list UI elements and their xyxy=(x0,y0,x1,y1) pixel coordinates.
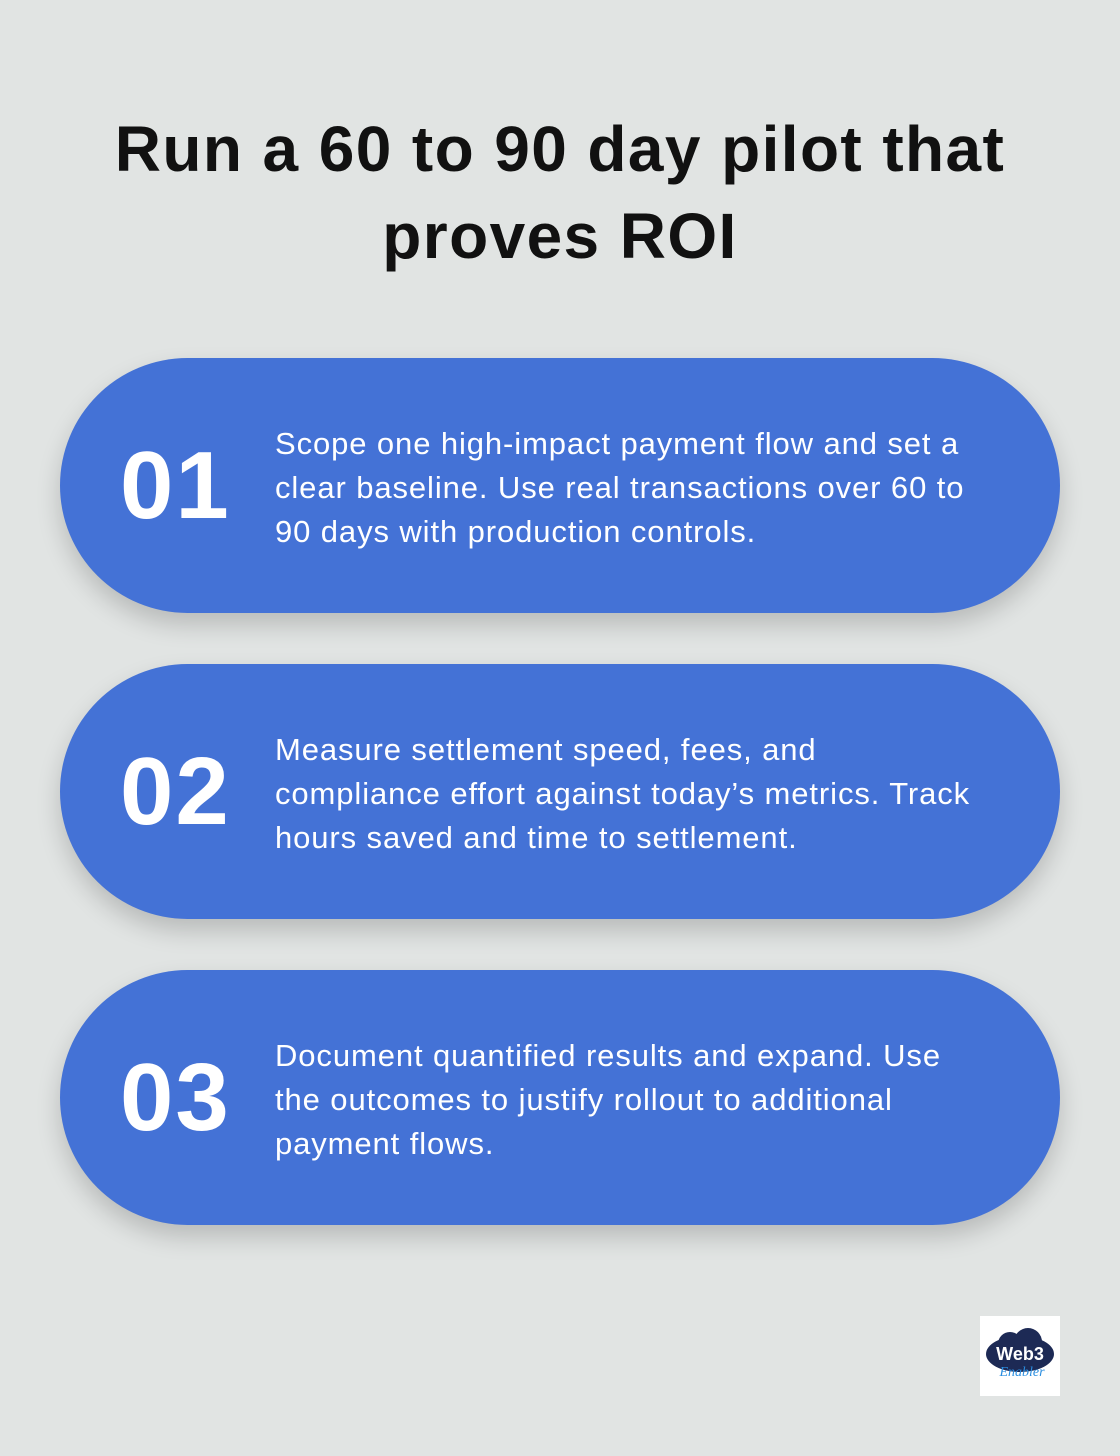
title: proves ROI xyxy=(382,200,738,272)
text: step 03: Document quantified results and expand. Use xyxy=(275,1038,941,1072)
text: step 02: compliance effort against today’s metrics. Track xyxy=(275,776,970,810)
title: Run a 60 to 90 day pilot that xyxy=(115,113,1005,185)
text: step 03: payment flows. xyxy=(275,1126,494,1160)
text: step 01: clear baseline. Use real transactions over 60 to xyxy=(275,470,964,504)
text: step 01 xyxy=(275,426,964,548)
title xyxy=(115,113,1005,272)
number 02: 02 xyxy=(120,738,231,845)
number 01: 01 xyxy=(120,432,231,539)
panel: step 02 xyxy=(60,664,1060,919)
text: step 03 xyxy=(275,1038,941,1160)
logo: Web3 xyxy=(996,1344,1044,1364)
logo xyxy=(980,1316,1060,1396)
text: step 02: Measure settlement speed, fees, and xyxy=(275,732,817,766)
panel: step 03 xyxy=(60,970,1060,1225)
number 03: 03 xyxy=(120,1044,231,1151)
text: step 01: 90 days with production controls. xyxy=(275,514,756,548)
panel: step 01 xyxy=(60,358,1060,613)
logo: Enabler xyxy=(998,1365,1045,1380)
text: step 03: the outcomes to justify rollout to additional xyxy=(275,1082,893,1116)
text: step 02 xyxy=(275,732,970,854)
text: step 02: hours saved and time to settlement. xyxy=(275,820,798,854)
text: step 01: Scope one high-impact payment flow and set a xyxy=(275,426,959,460)
